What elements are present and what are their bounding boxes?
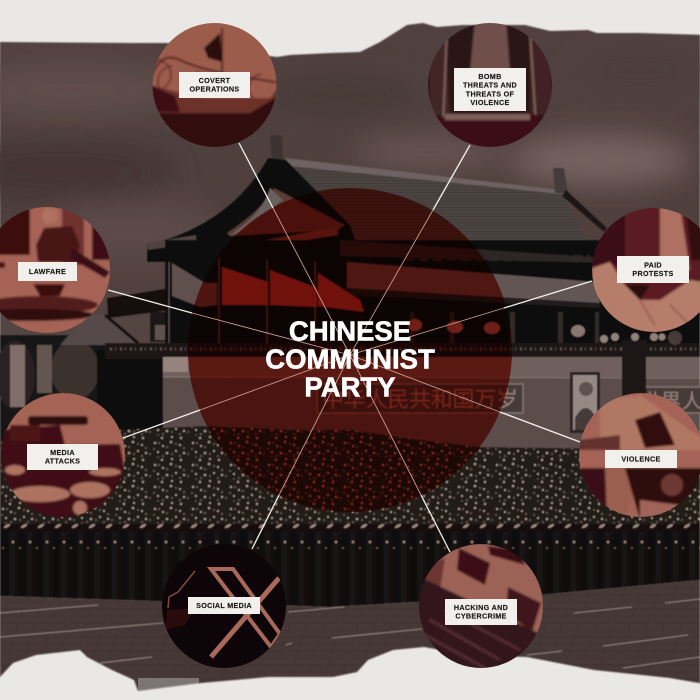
label: THREATS AND xyxy=(463,81,517,90)
sky xyxy=(0,0,700,440)
panel: media attacks xyxy=(0,392,126,520)
connector: lawfare xyxy=(108,290,350,355)
pavement xyxy=(0,580,700,700)
label xyxy=(18,262,77,281)
label: MEDIA xyxy=(50,448,75,457)
photo: microphones xyxy=(0,392,126,520)
panel: lawfare xyxy=(0,205,115,335)
title xyxy=(265,316,435,402)
connector: violence xyxy=(350,355,580,442)
label: COVERT xyxy=(199,76,231,85)
flags xyxy=(172,263,364,312)
connector: social media xyxy=(252,355,350,549)
crowd xyxy=(0,426,700,525)
flag poles xyxy=(169,258,315,350)
connector: covert operations xyxy=(239,143,350,355)
banner: 中华人民共和国万岁 xyxy=(322,387,518,412)
label: LAWFARE xyxy=(29,267,66,276)
large red circle xyxy=(188,188,512,512)
torn paper top xyxy=(0,0,700,57)
label: BOMB xyxy=(478,72,502,81)
label: CYBERCRIME xyxy=(455,612,507,621)
photo: stairway xyxy=(425,20,555,150)
label xyxy=(27,444,98,470)
label: ATTACKS xyxy=(45,457,80,466)
panel: covert operations xyxy=(152,23,276,147)
panel: paid protests xyxy=(590,205,700,340)
connector: bomb threats xyxy=(350,145,470,355)
photo: flag and barbed wire xyxy=(152,23,276,147)
gate body xyxy=(165,240,700,355)
label: PROTESTS xyxy=(632,269,674,278)
photo: screens and crowd xyxy=(418,543,544,671)
label xyxy=(445,599,517,625)
lamp post xyxy=(600,331,682,405)
photo: X logo xyxy=(160,543,290,671)
marching troops xyxy=(0,524,700,607)
connector: paid protests xyxy=(350,281,592,355)
upper eave detail xyxy=(340,240,605,263)
photo: clash xyxy=(578,392,700,520)
lower roof xyxy=(347,258,600,308)
label xyxy=(179,72,250,98)
label: HACKING AND xyxy=(454,603,508,612)
title: COMMUNIST xyxy=(265,344,435,374)
label xyxy=(454,68,526,111)
portrait of Mao xyxy=(570,372,600,433)
left trees and pillars xyxy=(0,335,110,445)
side pavilion xyxy=(60,288,172,435)
torn paper bottom xyxy=(0,647,700,700)
connector: media attacks xyxy=(123,355,350,438)
label xyxy=(617,256,689,283)
label: VIOLENCE xyxy=(470,98,510,107)
photo: protesters xyxy=(590,205,700,340)
panel: social media xyxy=(160,543,290,671)
label: SOCIAL MEDIA xyxy=(196,601,252,610)
title: PARTY xyxy=(304,372,396,402)
panel: bomb threats xyxy=(425,20,555,150)
panel: violence xyxy=(578,392,700,520)
columns and lanterns xyxy=(408,312,599,352)
wall xyxy=(163,357,700,452)
main roof xyxy=(147,135,607,262)
icon: X logo xyxy=(211,569,280,657)
banner xyxy=(317,384,700,413)
photo: gavel xyxy=(0,205,115,335)
label: THREATS OF xyxy=(466,89,514,98)
label: PAID xyxy=(644,260,662,270)
label: VIOLENCE xyxy=(621,455,661,464)
title: CHINESE xyxy=(289,316,411,346)
panel: hacking and cybercrime xyxy=(418,543,544,671)
connector: hacking xyxy=(350,355,450,552)
label: OPERATIONS xyxy=(190,85,240,94)
balcony crowd xyxy=(105,343,700,359)
